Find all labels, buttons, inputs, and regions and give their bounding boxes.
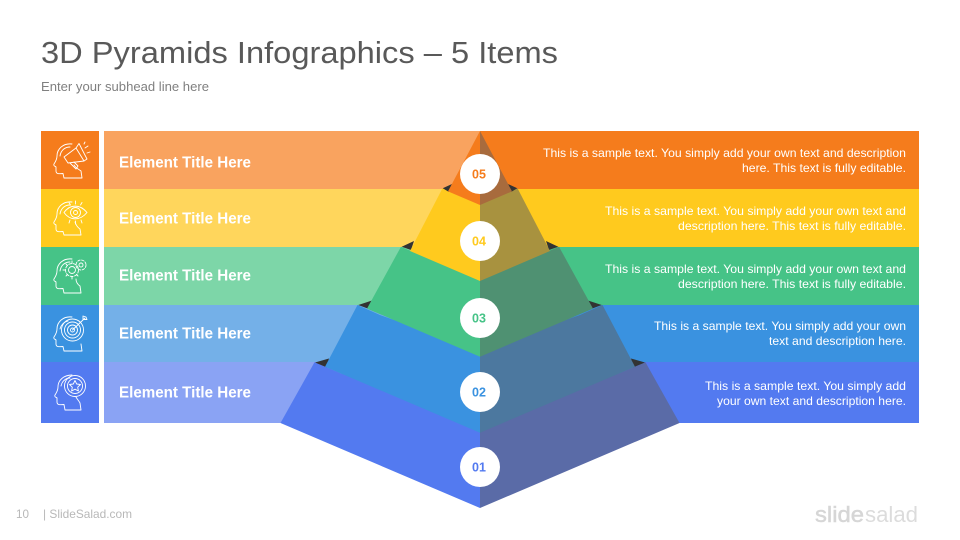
- number badge 03: [460, 298, 500, 338]
- pyramid level 4: [410, 184, 550, 281]
- pyramid level 1: [280, 358, 680, 508]
- number badge 01: [460, 447, 500, 487]
- number badge 02: [460, 372, 500, 412]
- number badge 05: [460, 154, 500, 194]
- pyramid level 5: [448, 131, 512, 205]
- row 3: green band: [41, 247, 919, 305]
- row 5: orange band: Element Title Here: [119, 154, 251, 172]
- row 4: yellow band: Element Title Here: [119, 210, 251, 228]
- number badge 03: 03: [472, 312, 486, 326]
- slidesalad logo: [815, 502, 918, 527]
- icon: head with gears: [54, 259, 86, 293]
- pyramid level 2: [325, 300, 635, 433]
- row 4: yellow band: description here. This text is fully editable.: [678, 219, 906, 233]
- row 2: blue band: This is a sample text. You simply add your own: [654, 319, 906, 333]
- slidesalad logo: salad: [865, 502, 918, 527]
- row 2: blue band: [41, 305, 919, 362]
- row 1: indigo band: This is a sample text. You simply add: [705, 379, 906, 393]
- row 4: yellow band: This is a sample text. You simply add your own text and: [605, 204, 906, 218]
- number badge 01: 01: [472, 460, 486, 474]
- icon: head with target: [54, 316, 87, 351]
- row 5: orange band: here. This text is fully editable.: [742, 161, 906, 175]
- row 2: blue band: text and description here.: [769, 334, 906, 348]
- row 5: orange band: [41, 131, 919, 189]
- pyramid: [280, 131, 680, 508]
- number badge 02: 02: [472, 386, 486, 400]
- row 3: green band: This is a sample text. You simply add your own text and: [605, 262, 906, 276]
- footer site name: | SlideSalad.com: [43, 507, 132, 521]
- row 5: orange band: This is a sample text. You simply add your own text and description: [543, 146, 906, 160]
- row 4: yellow band: [41, 189, 919, 247]
- row 1: indigo band: [41, 362, 919, 423]
- row 1: indigo band: your own text and description here.: [717, 394, 906, 408]
- icon: head with star badge: [55, 375, 86, 410]
- number badge 04: 04: [472, 234, 486, 248]
- subhead: Enter your subhead line here: [41, 80, 209, 94]
- row 3: green band: Element Title Here: [119, 268, 251, 284]
- icon: head with megaphone: [54, 142, 90, 178]
- title: 3D Pyramids Infographics – 5 Items: [41, 35, 558, 70]
- row 1: indigo band: Element Title Here: [119, 384, 251, 402]
- row 3: green band: description here. This text is fully editable.: [678, 277, 906, 291]
- row 2: blue band: Element Title Here: [119, 326, 251, 342]
- icon: head with eye: [54, 201, 87, 235]
- number badge 04: [460, 221, 500, 261]
- number badge 05: 05: [472, 168, 486, 182]
- footer page number: 10: [16, 507, 29, 521]
- pyramid level 3: [367, 241, 593, 357]
- slidesalad logo: slide: [815, 502, 864, 527]
